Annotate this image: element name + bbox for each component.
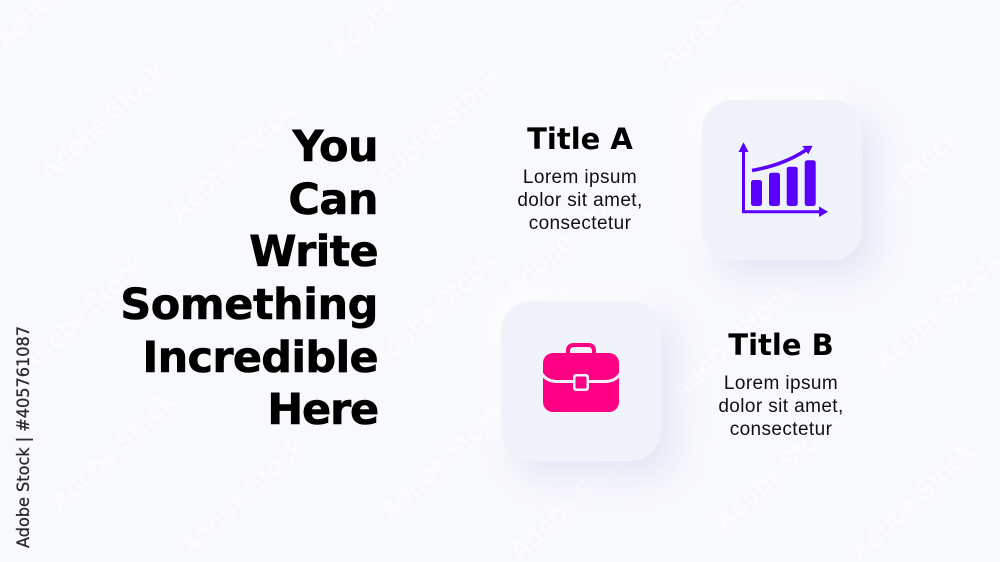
main heading [120, 122, 378, 435]
stock id label: Adobe Stock | #405761087 [14, 326, 33, 548]
watermark pattern: Adobe Stock [174, 431, 311, 561]
text block A: Lorem ipsum [523, 167, 637, 188]
watermark pattern: Adobe Stock [369, 61, 506, 191]
text block A [517, 167, 643, 234]
text block A: dolor sit amet, [517, 190, 643, 211]
watermark pattern: Adobe Stock [14, 249, 151, 379]
card: chart icon [702, 100, 862, 260]
text block B: dolor sit amet, [718, 396, 844, 417]
watermark pattern: Adobe Stock [499, 174, 636, 304]
watermark pattern: Adobe Stock [364, 246, 501, 376]
title B: Title B [728, 328, 834, 362]
main heading: Something [120, 280, 378, 330]
title A: Title A [527, 122, 633, 156]
text block B: Lorem ipsum [724, 373, 838, 394]
main heading: Here [267, 385, 378, 435]
text block B [718, 373, 844, 440]
main heading: Write [249, 227, 378, 277]
watermark pattern: Adobe Stock [709, 406, 846, 536]
watermark pattern: Adobe Stock [699, 81, 836, 211]
watermark pattern: Adobe Stock [374, 396, 511, 526]
card: briefcase icon [501, 301, 661, 461]
main heading: Can [288, 175, 378, 225]
text block B: consectetur [730, 419, 832, 440]
watermark pattern: Adobe Stock [164, 96, 301, 226]
main heading: Incredible [142, 333, 378, 383]
watermark pattern: Adobe Stock [664, 276, 801, 406]
main heading: You [292, 122, 378, 172]
watermark pattern: Adobe Stock [44, 386, 181, 516]
icon: briefcase [543, 343, 619, 412]
watermark pattern: Adobe Stock [829, 121, 966, 251]
watermark pattern: Adobe Stock [34, 56, 171, 186]
text block A: consectetur [529, 213, 631, 234]
icon: bar chart with arrow [738, 142, 828, 217]
